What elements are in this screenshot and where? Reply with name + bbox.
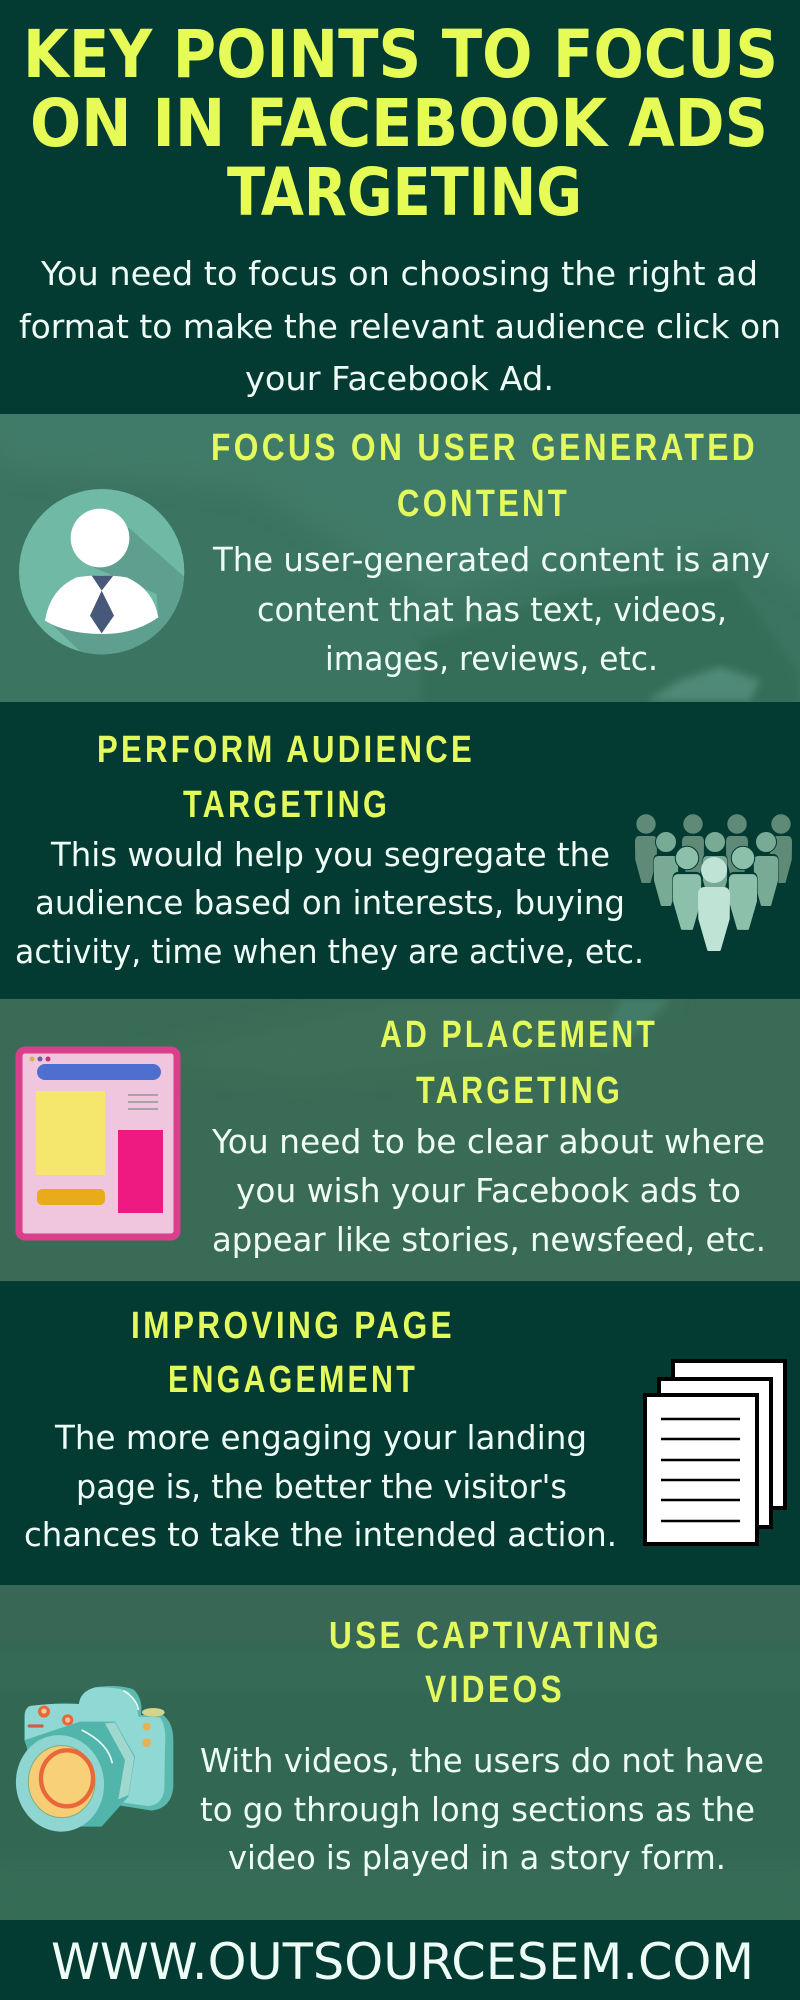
panel background: user generated content: [0, 414, 800, 702]
intro text: [19, 254, 781, 398]
panel background: ad placement targeting: [0, 999, 800, 1281]
heading: focus on user generated content: [211, 427, 758, 525]
icon: browser layout: [19, 1050, 177, 1237]
heading: use captivating videos: [329, 1615, 662, 1711]
heading: ad placement targeting: [380, 1014, 658, 1112]
panel: perform audience targeting: [15, 729, 792, 971]
text: user generated content body: content that has text, videos,: [257, 590, 727, 629]
panel: use captivating videos: [0, 1575, 800, 1930]
heading: perform audience targeting: PERFORM AUDIENCE: [97, 729, 475, 771]
text: page engagement body: The more engaging your landing: [54, 1418, 587, 1457]
text: ad placement body: you wish your Facebook ads to: [236, 1171, 741, 1210]
icon: stacked documents: [645, 1361, 785, 1544]
text: ad placement body: You need to be clear about where: [211, 1122, 765, 1161]
text: ad placement body: appear like stories, newsfeed, etc.: [212, 1220, 766, 1259]
panel: user generated content: [0, 414, 800, 702]
heading: ad placement targeting: AD PLACEMENT: [380, 1014, 658, 1056]
heading: focus on user generated content: CONTENT: [397, 483, 570, 525]
panel: improving page engagement: [24, 1305, 785, 1554]
text: page engagement body: chances to take the intended action.: [24, 1515, 617, 1554]
text: captivating videos body: [200, 1741, 764, 1877]
icon: person with tie: [19, 489, 184, 654]
text: ad placement body: [211, 1122, 766, 1259]
heading: perform audience targeting: [97, 729, 475, 826]
icon: crowd of people: [635, 814, 792, 951]
panel background: use captivating videos: [0, 1575, 800, 1930]
intro text: your Facebook Ad.: [245, 359, 554, 398]
text: page engagement body: [24, 1418, 617, 1554]
text: captivating videos body: to go through long sections as the: [200, 1790, 755, 1829]
text: audience targeting body: audience based on interests, buying: [35, 883, 625, 922]
text: captivating videos body: video is played in a story form.: [228, 1838, 726, 1877]
heading: improving page engagement: IMPROVING PAGE: [131, 1305, 455, 1347]
text: user generated content body: The user-generated content is any: [212, 540, 770, 579]
intro text: You need to focus on choosing the right ad: [40, 254, 758, 293]
text: page engagement body: page is, the better the visitor's: [76, 1467, 567, 1506]
heading: perform audience targeting: TARGETING: [183, 784, 390, 826]
icon: camera: [10, 1686, 173, 1837]
heading: ad placement targeting: TARGETING: [416, 1070, 623, 1112]
heading: improving page engagement: ENGAGEMENT: [168, 1359, 418, 1401]
panel: ad placement targeting: [0, 999, 800, 1281]
title: TARGETING: [227, 154, 582, 231]
intro text: format to make the relevant audience click on: [19, 307, 781, 346]
text: captivating videos body: With videos, the users do not have: [200, 1741, 764, 1780]
title: [23, 16, 778, 231]
heading: use captivating videos: VIDEOS: [425, 1669, 565, 1711]
text: user generated content body: images, reviews, etc.: [325, 639, 658, 678]
text: audience targeting body: activity, time when they are active, etc.: [15, 932, 644, 971]
text: user generated content body: [212, 540, 770, 678]
footer url: WWW.OUTSOURCESEM.COM: [51, 1933, 754, 1991]
heading: improving page engagement: [131, 1305, 455, 1401]
text: audience targeting body: [15, 835, 644, 971]
text: audience targeting body: This would help you segregate the: [50, 835, 610, 874]
heading: use captivating videos: USE CAPTIVATING: [329, 1615, 662, 1657]
